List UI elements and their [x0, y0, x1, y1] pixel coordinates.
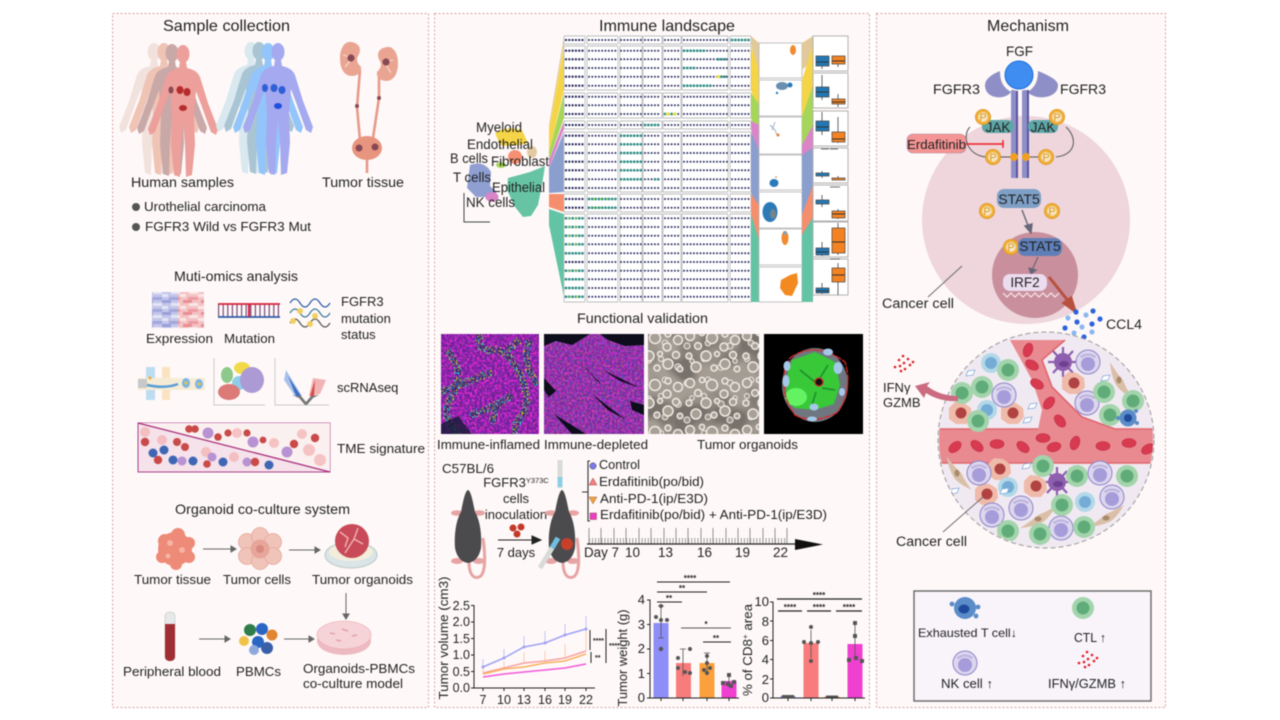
label: mutation: Mutation [224, 331, 275, 346]
label: cell inoculation: cells [503, 491, 529, 506]
legend: treatment groups: Erdafitinib(po/bid) [599, 474, 704, 489]
IRF2 [1003, 274, 1047, 291]
icon: microfluidics [138, 367, 205, 400]
label: co-culture model [303, 661, 416, 691]
blood vessels [930, 340, 1160, 463]
chart: tumor weight bar chart: 3 [638, 617, 645, 632]
label: mouse strain: C57BL/6 [442, 461, 494, 476]
timeline: dosing schedule: 13 [658, 545, 673, 560]
legend: treatment groups: Control [599, 457, 640, 472]
JAK right: JAK [1031, 120, 1055, 135]
arrow [199, 636, 230, 642]
labels: cell types: NK cells [466, 195, 515, 210]
chart: split UMAP panels [759, 43, 802, 302]
small diamonds [950, 370, 1110, 494]
heading: immune landscape: Immune landscape [599, 18, 735, 35]
icon: IFN-gamma dots [894, 355, 914, 372]
cancer cell body [922, 116, 1130, 324]
chart: CD8 area bar chart: **** [813, 591, 826, 600]
timeline: dosing schedule: 16 [697, 545, 712, 560]
label: IFN-gamma GZMB: IFNγ/GZMB ↑ [1048, 677, 1126, 691]
icon: red human silhouettes [119, 43, 218, 177]
chart: tumor volume line chart: 2.0 [453, 615, 470, 629]
bullet: FGFR3 status: FGFR3 Wild vs FGFR3 Mut [145, 219, 311, 234]
red blood cells [947, 342, 1156, 456]
chart: tumor weight bar chart: ** [679, 584, 686, 593]
heading: mechanism: Mechanism [987, 18, 1069, 35]
label: co-culture model: Organoids-PBMCs [303, 661, 416, 676]
chart: tumor weight bar chart: ** [666, 594, 673, 603]
chart: CD8 area bar chart: 10 [755, 594, 769, 609]
image: immune-depleted multiplex [544, 334, 644, 434]
icon: co-culture dish [317, 621, 371, 655]
nucleus [992, 232, 1078, 318]
label: IFN-gamma GZMB [883, 380, 921, 410]
chart: tumor volume line chart: 19 [558, 693, 572, 707]
label: FGFR3 mutation status: status [341, 327, 376, 342]
label: CCL4: CCL4 [1106, 317, 1143, 332]
label: cancer cell: Cancer cell [896, 534, 967, 549]
arrow: IFN-gamma release [915, 382, 958, 401]
label: cell inoculation [483, 475, 549, 560]
label: CTL: CTL ↑ [1074, 631, 1106, 645]
label: FGFR3 right: FGFR3 [1060, 81, 1106, 97]
pointer: cancer cell [943, 497, 983, 532]
image: organoid immunofluorescence [764, 334, 863, 434]
labels: cell types: B cells [450, 151, 488, 166]
icon: tumor organoid dish [325, 524, 377, 568]
heading: sample collection: Sample collection [163, 18, 290, 35]
label: peripheral blood: Peripheral blood [123, 664, 221, 679]
chart: tumor volume line chart: **** [593, 638, 604, 645]
image: immune-inflamed multiplex [441, 334, 539, 434]
label: TME signature: TME signature [337, 441, 425, 456]
macrophages [977, 353, 1095, 512]
icon: IFN-gamma GZMB dots [1078, 651, 1098, 668]
chart: CD8 area bar chart: 6 [762, 633, 769, 648]
chart: tumor weight bar chart: 1 [638, 666, 645, 681]
icon: CTL [1072, 597, 1094, 619]
ribbons: UMAP panels to box plots [802, 36, 813, 302]
labels: cell types: Epithelial [492, 180, 545, 195]
stromal cells [946, 362, 1132, 528]
chart: tumor weight bar chart [615, 574, 739, 706]
labels: image captions [437, 437, 799, 452]
label: scRNAseq: scRNAseq [337, 380, 398, 395]
label: cell inoculation: FGFR3 [483, 475, 526, 490]
arrow [284, 636, 314, 642]
cytotoxic T cells [951, 359, 1144, 545]
icon: mutation status waves [290, 299, 330, 327]
arrow [289, 547, 320, 553]
arrow [203, 546, 236, 552]
y axis label: Tumor volume (cm3) [436, 576, 451, 700]
labels: cell types: Fibroblast [491, 154, 549, 169]
legend: treatment groups: Erdafitinib(po/bid) + Anti-PD-1(ip/E3D) [600, 507, 827, 522]
y axis label: Tumor weight (g) [615, 610, 630, 706]
panel: immune landscape and functional validation [434, 14, 870, 708]
legend: treatment groups: Anti-PD-1(ip/E3D) [600, 491, 708, 506]
labels: image captions: Immune-inflamed [437, 437, 540, 452]
icon: PBMCs [239, 623, 278, 655]
IRF2: IRF2 [1010, 275, 1040, 290]
cancer cells [949, 372, 1085, 505]
phospho groups [976, 110, 1064, 254]
y axis label: + [741, 634, 750, 639]
label: tumor cells: Tumor cells [223, 572, 292, 587]
chart: tumor volume line chart: 1.0 [453, 648, 470, 662]
chart: CD8 area bar chart: **** [784, 603, 797, 612]
chart: tumor volume line chart: 10 [497, 693, 511, 707]
label: FGFR3 left: FGFR3 [933, 81, 980, 97]
panel: sample collection and organoid system [112, 14, 428, 708]
label: FGFR3 mutation status: FGFR3 [341, 294, 384, 309]
chart: tumor volume line chart: 0.5 [453, 665, 470, 679]
STAT5 cytoplasm: STAT5 [998, 191, 1040, 207]
chart: tumor volume line chart: 7 [480, 693, 487, 707]
image: tumor organoids brightfield [648, 334, 759, 434]
chart: tumor weight bar chart: * [704, 620, 708, 629]
heading: organoid co-culture system: Organoid co-culture system [175, 501, 350, 517]
y axis label: area [740, 603, 755, 634]
dendritic cells [1045, 346, 1076, 496]
panel: mechanism [876, 14, 1166, 708]
arrow: seven days [498, 536, 541, 544]
labels: cell types: T cells [453, 170, 491, 185]
label: cell inoculation: 7 days [497, 545, 536, 560]
icon: control mouse [451, 490, 485, 577]
label: cell inoculation: Y373C [526, 476, 549, 485]
icon: CCL4 dots [1062, 308, 1103, 340]
icon: mutation DNA [218, 304, 280, 317]
timeline: dosing schedule: 19 [735, 545, 750, 560]
timeline: dosing schedule: 22 [773, 545, 788, 560]
DNA [1003, 293, 1059, 297]
ribbons: dot plot to UMAP panels [751, 36, 759, 302]
chart: CD8 area bar chart: 8 [762, 614, 769, 629]
feedback arcs [966, 127, 1073, 157]
labels: cell types: Myeloid [476, 120, 522, 135]
icon: urinary tract with tumors [340, 42, 398, 173]
labels: cell types [450, 120, 549, 210]
bullet: urothelial carcinoma: Urothelial carcinoma [144, 199, 267, 214]
figure: tumor microenvironment [930, 332, 1160, 548]
label: exhausted T cell: Exhausted T cell↓ [918, 626, 1017, 640]
ribbons: UMAP to dot plot [549, 36, 564, 297]
chart: tumor weight bar chart: 0 [638, 690, 645, 705]
chart: box plots [813, 36, 848, 295]
label: FGF: FGF [1006, 43, 1033, 59]
chart: tumor volume line chart: 13 [517, 693, 531, 707]
chart: cell type UMAP [467, 129, 545, 217]
label: tumor tissue: Tumor tissue [134, 572, 211, 587]
timeline: dosing schedule [584, 528, 823, 560]
chart: tumor volume line chart: 22 [579, 693, 593, 707]
icon: injected cells [510, 524, 524, 538]
icon: NK cell [953, 651, 977, 675]
heading: functional validation: Functional validation [577, 310, 708, 326]
icon: exhausted T cell [950, 597, 980, 619]
chart: CD8 area bar chart: **** [813, 603, 826, 612]
labels: image captions: Immune-depleted [544, 437, 648, 452]
pointer: cancer cell [928, 266, 962, 297]
chart scale bar [464, 193, 490, 222]
y axis label: % of CD8 [740, 640, 755, 696]
chart: CD8 area bar chart: 0 [762, 690, 769, 705]
chart: volcano plot [275, 358, 329, 405]
chart: tumor weight bar chart: ** [713, 634, 720, 643]
chart: CD8 area bar chart [740, 591, 865, 705]
chart: tumor weight bar chart: **** [684, 574, 697, 583]
chart: tumor volume line chart: 16 [538, 693, 552, 707]
chart: tumor volume line chart: ** [595, 655, 601, 662]
labels: cell types: Endothelial [467, 137, 533, 152]
chart: tumor weight bar chart: 4 [638, 592, 645, 607]
label: FGFR3 mutation status: mutation [341, 311, 391, 326]
chart: tumor volume line chart: 1.5 [453, 632, 470, 646]
chart: CD8 area bar chart: 4 [762, 652, 769, 667]
chart: scRNA UMAP [214, 358, 265, 405]
icon: blue human silhouettes [216, 42, 313, 175]
label: tumor tissue: Tumor tissue [322, 174, 404, 190]
timeline: dosing schedule: Day 7 [584, 545, 619, 560]
legend: treatment groups [589, 457, 827, 522]
exhausted T cell [1116, 409, 1139, 426]
label: cell inoculation: inoculation [485, 507, 547, 522]
bracket: treatment groups [582, 461, 590, 521]
chart: tumor weight bar chart: 2 [638, 641, 645, 656]
inhibition line [966, 140, 1003, 148]
drug: erdafitinib: Erdafitinib [907, 137, 966, 152]
icon: tumor tissue [156, 528, 195, 570]
chart: tumor volume line chart [436, 576, 620, 707]
chart: marker gene dot plot [564, 36, 751, 302]
label: tumor organoids: Tumor organoids [312, 572, 414, 587]
label: expression: Expression [146, 331, 213, 346]
chart: tumor volume line chart: 2.5 [453, 599, 470, 613]
label: cancer cell: Cancer cell [882, 296, 954, 311]
chart: tumor volume line chart: 0.0 [453, 681, 470, 695]
JAK left: JAK [986, 120, 1010, 135]
STAT5 nucleus: STAT5 [1019, 238, 1061, 254]
chart: CD8 area bar chart: 2 [762, 672, 769, 687]
labels: image captions: Tumor organoids [697, 437, 799, 452]
legend: cell changes [914, 591, 1151, 701]
arrow: CCL4 secretion [1049, 277, 1075, 311]
arrow [1022, 210, 1032, 233]
figure: TME signature box [138, 423, 330, 472]
label: NK cell: NK cell ↑ [941, 677, 993, 691]
arrow [343, 593, 349, 619]
label: PBMCs: PBMCs [236, 664, 282, 679]
icon: expression heatmap [152, 292, 204, 328]
label: IFN-gamma GZMB: GZMB [883, 395, 921, 410]
icon: FGFR3 receptor with FGF [985, 59, 1058, 178]
label: co-culture model: co-culture model [303, 676, 403, 691]
label: IFN-gamma GZMB: IFNγ [883, 380, 911, 395]
icon: treated mouse with syringes [540, 460, 579, 577]
chart: CD8 area bar chart: **** [843, 603, 856, 612]
timeline: dosing schedule: 10 [625, 545, 640, 560]
label: human samples: Human samples [131, 174, 234, 190]
chart: tumor volume line chart: **** [609, 643, 620, 650]
NK cells [967, 350, 1124, 540]
icon: tumor cells [238, 528, 282, 570]
arrow [1029, 257, 1038, 274]
heading: multi-omics analysis: Muti-omics analysis [174, 268, 298, 284]
icon: blood tube [165, 612, 175, 661]
